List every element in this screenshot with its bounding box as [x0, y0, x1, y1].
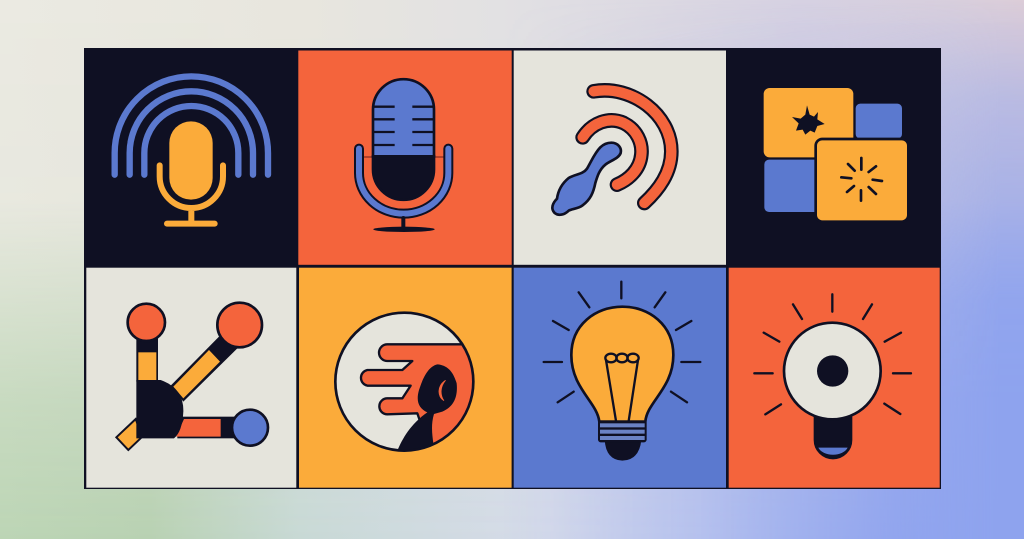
icon: vertical arm [136, 338, 158, 382]
icon: node circles [128, 303, 268, 446]
icon: yellow tile with sunburst [816, 139, 908, 222]
panel: profile in circle on yellow [299, 268, 512, 488]
grid frame [84, 48, 941, 489]
icon: light rays [544, 282, 700, 402]
panel: node diagram on cream [86, 268, 296, 488]
panel: light bulb on blue [514, 268, 726, 488]
panel: studio mic on orange [298, 50, 512, 265]
icon: broadcast arcs [115, 76, 268, 175]
icon: sound waves [583, 90, 671, 203]
icon: yellow tile with splat [764, 88, 853, 157]
icon: filament [605, 354, 639, 421]
icon: diagonal arm [171, 337, 237, 402]
icon: head silhouette [396, 364, 457, 455]
icon: horizontal arm [176, 417, 236, 438]
icon: bulb glass [571, 307, 673, 422]
panel: podcast mic on navy [84, 50, 298, 264]
icon: central hub [136, 380, 183, 438]
icon: bulb stem [815, 412, 851, 458]
icon: microphone stand cradle [359, 149, 448, 232]
icon: bulb base [598, 420, 647, 461]
icon: blue ear blob [552, 143, 621, 215]
panel: eye bulb on orange [729, 268, 940, 488]
icon: eye circle [784, 323, 881, 419]
icon: yellow microphone [160, 121, 223, 224]
icon: orange motion fingers [361, 344, 477, 452]
panel: ear and sound waves on cream [514, 50, 726, 265]
icon: microphone head [373, 79, 434, 200]
icon: rays [754, 294, 911, 414]
panel: overlapping tiles on navy [727, 50, 940, 265]
icon: lower-left stripe [116, 419, 142, 450]
icon: blue tiles [764, 104, 902, 212]
icon grid [84, 48, 941, 489]
icon: ear crescent [439, 380, 446, 401]
